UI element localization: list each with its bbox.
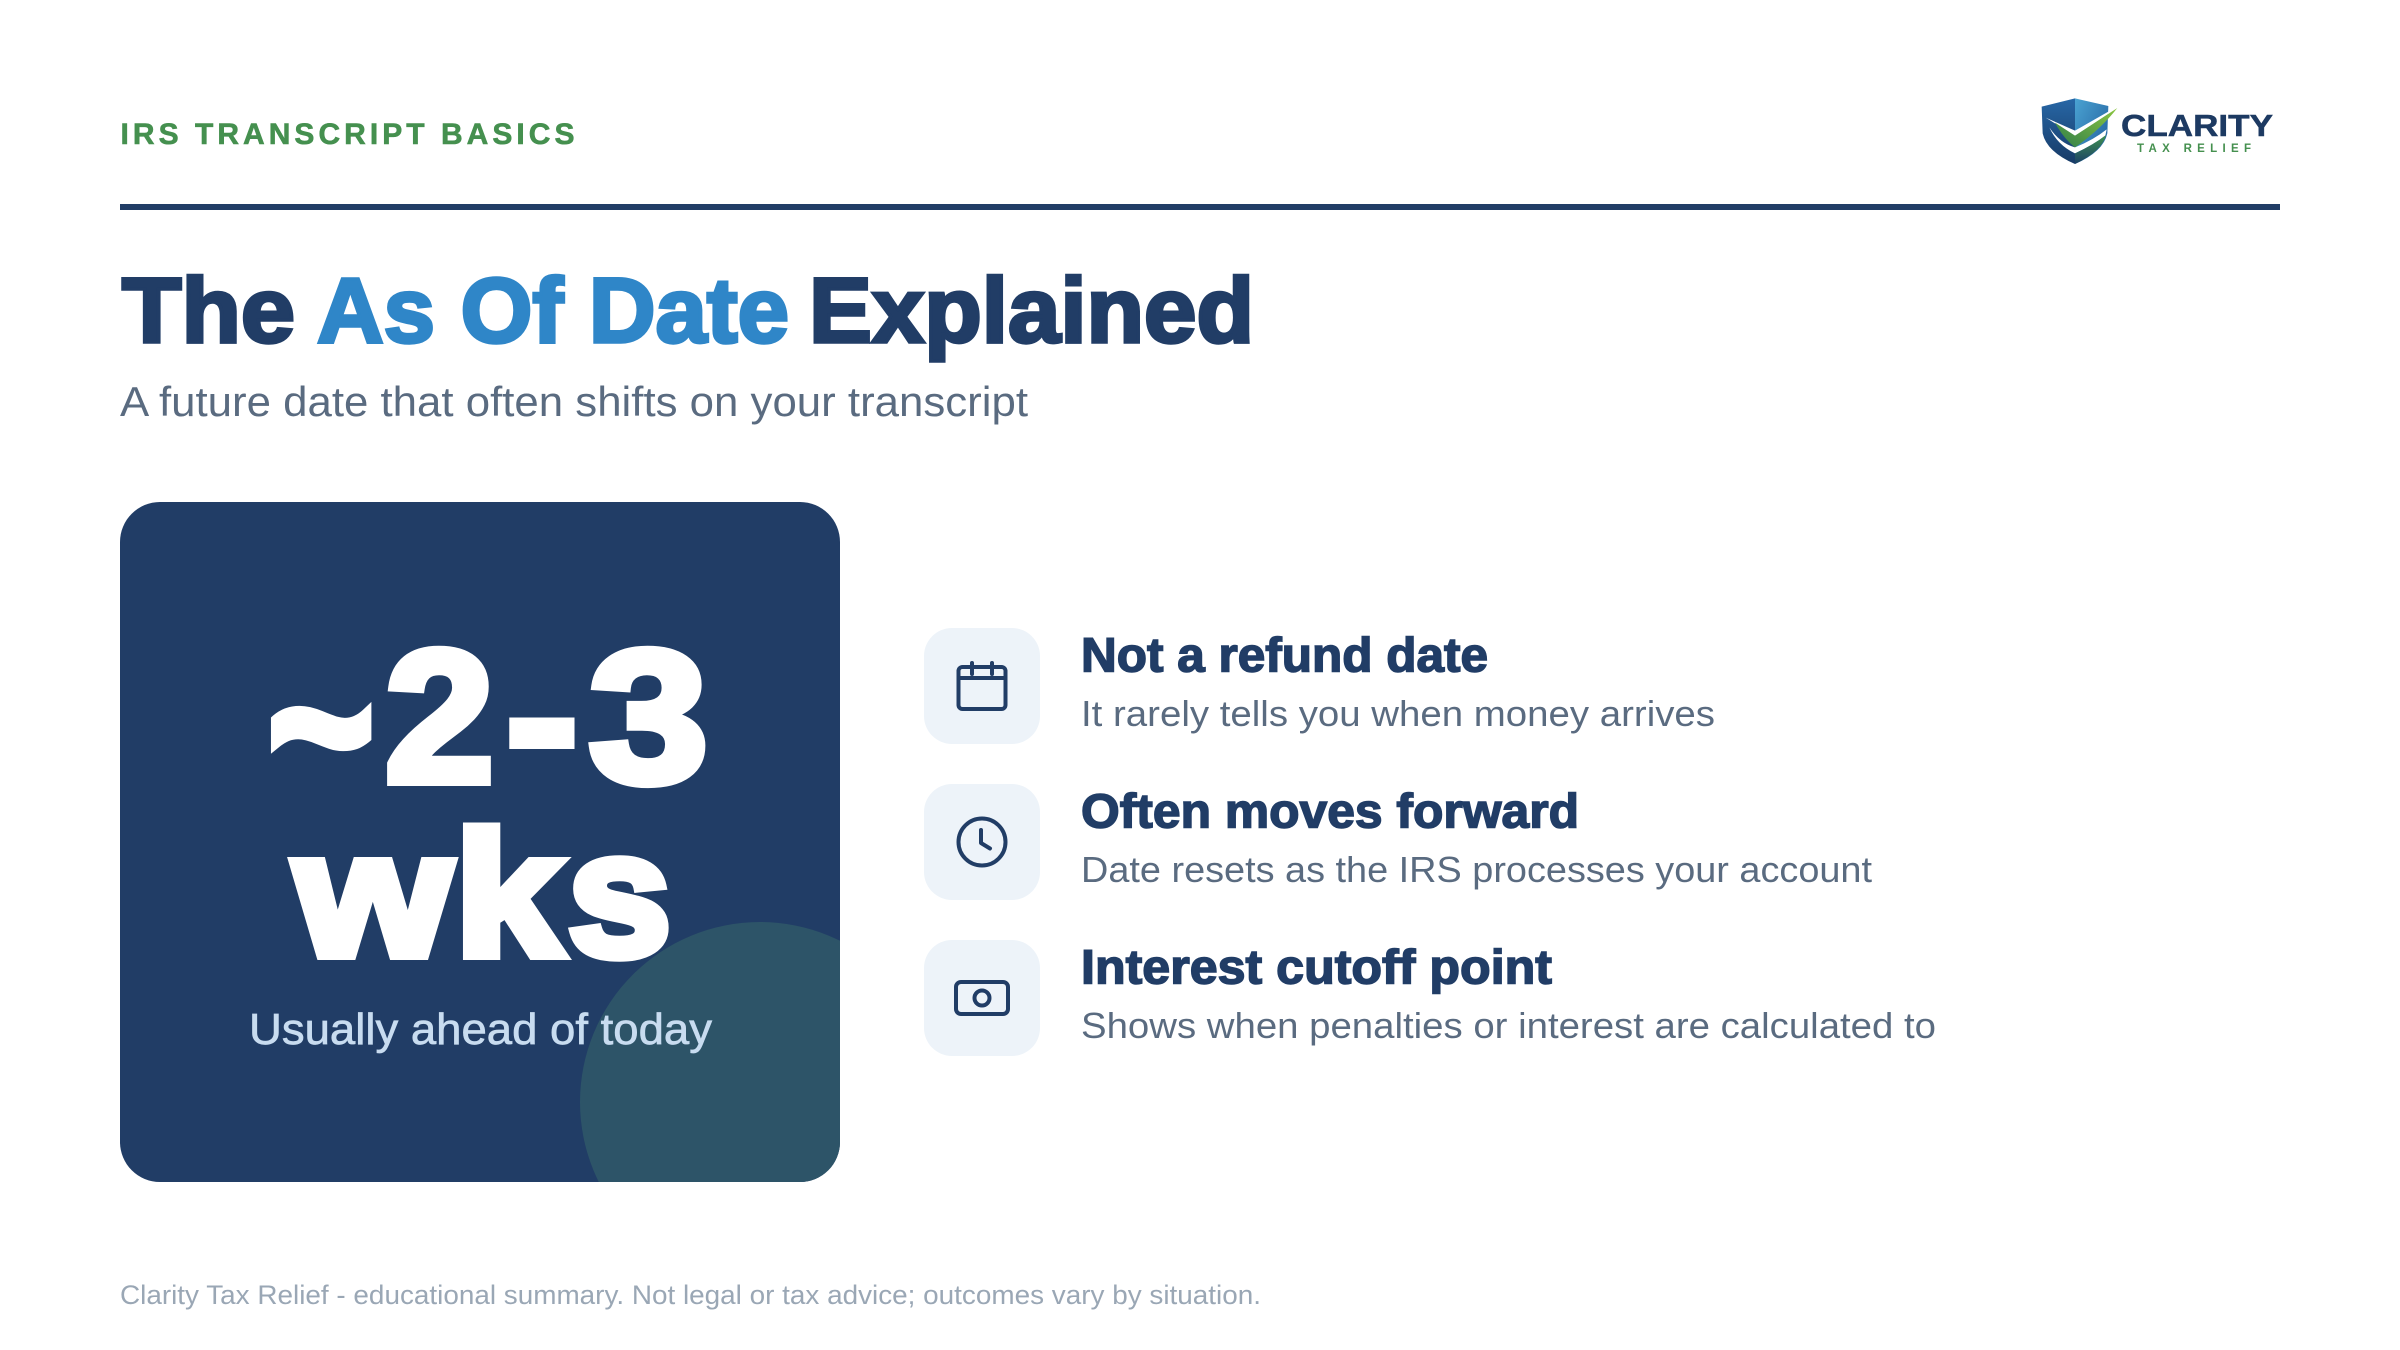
title: [122, 260, 1254, 362]
eyebrow label: IRS TRANSCRIPT BASICS: [120, 118, 574, 151]
item description: It rarely tells you when money arrives: [1081, 693, 1715, 734]
card background: [120, 502, 840, 1182]
icon: shield with check: [2042, 98, 2117, 164]
item heading: Often moves forward: [1081, 786, 1579, 838]
panel: stat card: [120, 502, 840, 1182]
icon: money: [956, 982, 1008, 1014]
header divider: [120, 204, 2280, 210]
icon tile: [924, 940, 1040, 1056]
big stat: k: [455, 797, 563, 993]
big stat: ~: [269, 608, 373, 843]
subtitle: A future date that often shifts on your transcript: [120, 378, 1028, 425]
title: Explained: [809, 260, 1254, 362]
icon tile: [924, 784, 1040, 900]
logo tagline: TAX RELIEF: [2137, 143, 2251, 155]
footer disclaimer: Clarity Tax Relief - educational summary. Not legal or tax advice; outcomes vary by situation.: [120, 1280, 1261, 1310]
item: not a refund date: [924, 628, 1715, 744]
big stat: 2: [385, 612, 494, 822]
big stat: -: [506, 612, 578, 822]
item heading: Not a refund date: [1081, 630, 1488, 682]
item: interest cutoff point: [924, 940, 1936, 1056]
item: often moves forward: [924, 784, 1872, 900]
decorative circle: [580, 922, 840, 1182]
title: As Of Date: [317, 260, 789, 362]
logo: Clarity Tax Relief: [2042, 98, 2273, 164]
big stat: w: [294, 797, 452, 993]
big stat: [269, 608, 708, 993]
stat caption: Usually ahead of today: [249, 1005, 712, 1054]
icon: calendar: [958, 663, 1006, 709]
icon tile: [924, 628, 1040, 744]
big stat: s: [568, 797, 671, 993]
item description: Date resets as the IRS processes your account: [1081, 849, 1872, 890]
logo wordmark: CLARITY: [2121, 108, 2273, 143]
big stat: 3: [589, 612, 708, 822]
item heading: Interest cutoff point: [1081, 942, 1552, 994]
title: The: [122, 260, 295, 362]
icon: clock: [958, 818, 1006, 866]
item description: Shows when penalties or interest are calculated to: [1081, 1005, 1936, 1046]
